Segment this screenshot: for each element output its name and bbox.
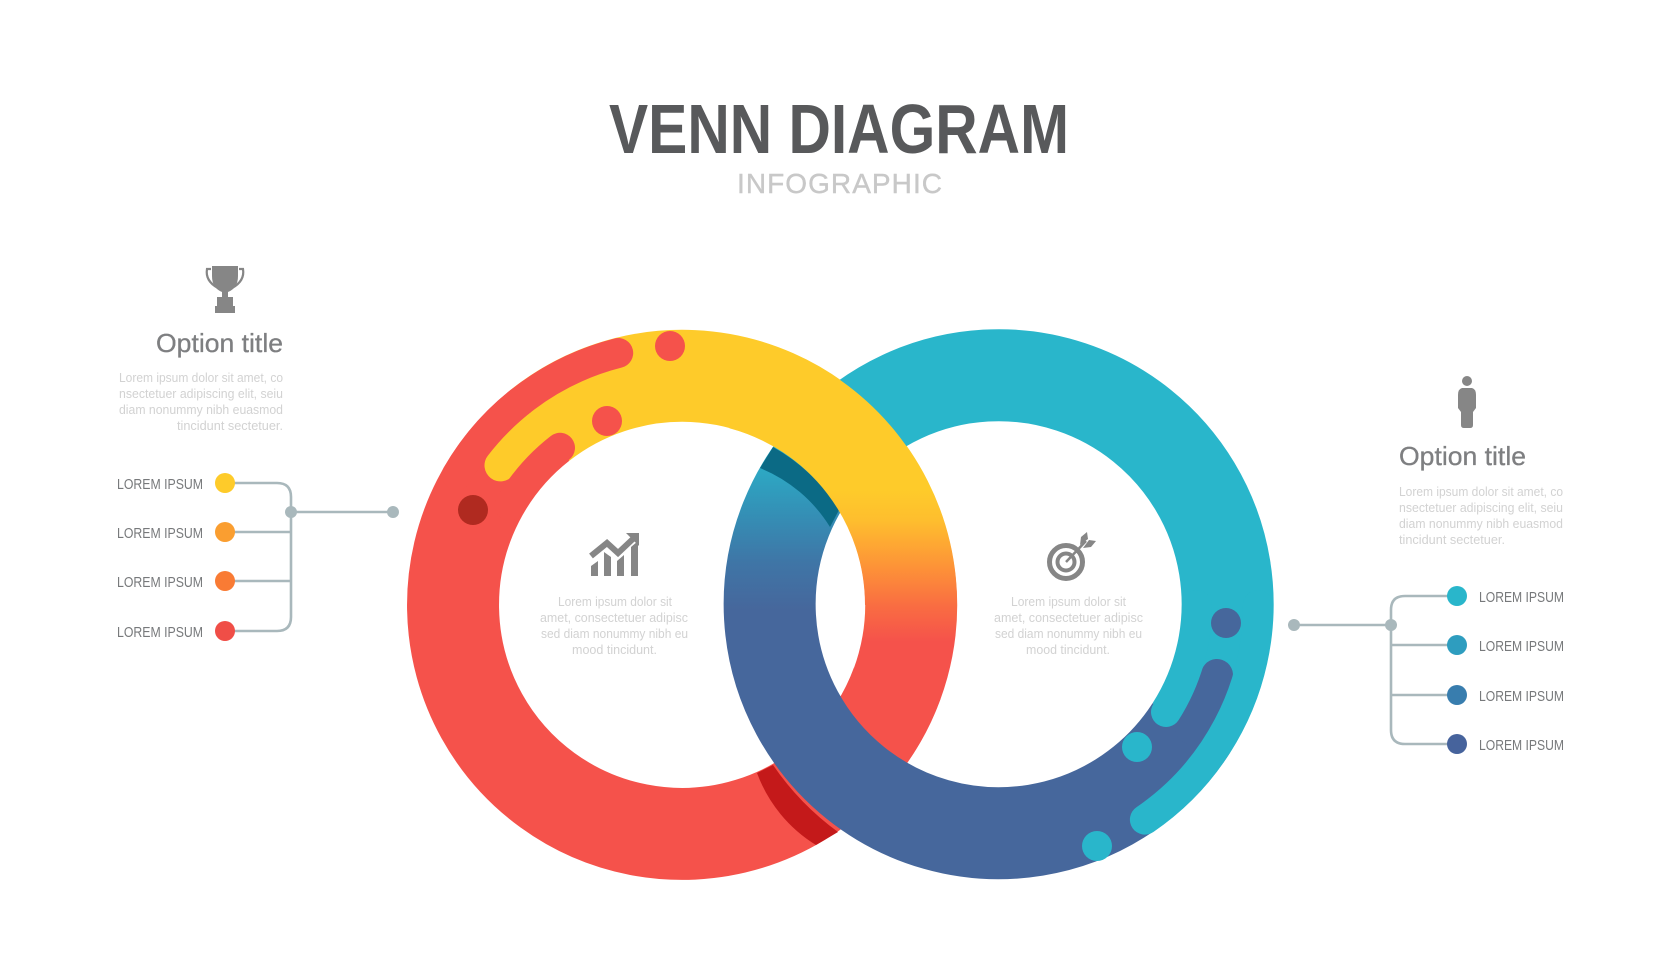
center text: left ring: Lorem ipsum dolor sit: [558, 594, 672, 609]
list items: LOREM IPSUM: [117, 477, 203, 493]
center text: left ring: [540, 594, 688, 657]
list items: LOREM IPSUM: [1479, 689, 1564, 705]
center text: right ring: [994, 594, 1143, 657]
list items: LOREM IPSUM: [1479, 590, 1564, 606]
center text: left ring: amet, consectetuer adipisc: [540, 610, 688, 625]
connector tree: [225, 483, 399, 631]
description: diam nonummy nibh euasmod: [1399, 516, 1563, 531]
list items: LOREM IPSUM: [117, 625, 203, 641]
list items: LOREM IPSUM: [1479, 639, 1564, 655]
title: VENN DIAGRAM: [609, 90, 1069, 168]
description: [119, 370, 283, 433]
description: Lorem ipsum dolor sit amet, co: [1399, 484, 1563, 499]
icon: growth chart: [591, 533, 639, 576]
center text: left ring: sed diam nonummy nibh eu: [541, 626, 688, 641]
description: [1399, 484, 1563, 547]
description: nsectetuer adipiscing elit, seiu: [119, 386, 283, 401]
list items: LOREM IPSUM: [117, 575, 203, 591]
description: Lorem ipsum dolor sit amet, co: [119, 370, 283, 385]
center text: right ring: amet, consectetuer adipisc: [994, 610, 1143, 625]
title: [609, 90, 1069, 199]
center text: left ring: mood tincidunt.: [572, 642, 657, 657]
venn diagram: left ring upper overlap: [741, 384, 911, 605]
center text: right ring: mood tincidunt.: [1026, 642, 1110, 657]
description: diam nonummy nibh euasmod: [119, 402, 283, 417]
icon: person: [1458, 376, 1476, 428]
description: tincidunt sectetuer.: [177, 418, 283, 433]
subtitle: INFOGRAPHIC: [737, 168, 942, 199]
list items: [117, 473, 235, 641]
center text: right ring: sed diam nonummy nibh eu: [995, 626, 1142, 641]
panel: right option: [1288, 376, 1564, 754]
option title: Option title: [1399, 441, 1526, 471]
description: tincidunt sectetuer.: [1399, 532, 1505, 547]
description: nsectetuer adipiscing elit, seiu: [1399, 500, 1563, 515]
option title: Option title: [156, 328, 283, 358]
venn diagram: left ring lower layer: [453, 331, 911, 845]
connector tree: [1288, 596, 1457, 744]
list items: LOREM IPSUM: [1479, 738, 1564, 754]
venn diagram: right ring: [760, 375, 1258, 861]
icon: target with arrow: [1050, 532, 1096, 578]
list items: [1447, 586, 1564, 754]
center text: right ring: Lorem ipsum dolor sit: [1011, 594, 1126, 609]
panel: left option: [117, 266, 399, 641]
icon: trophy: [207, 266, 243, 313]
list items: LOREM IPSUM: [117, 526, 203, 542]
